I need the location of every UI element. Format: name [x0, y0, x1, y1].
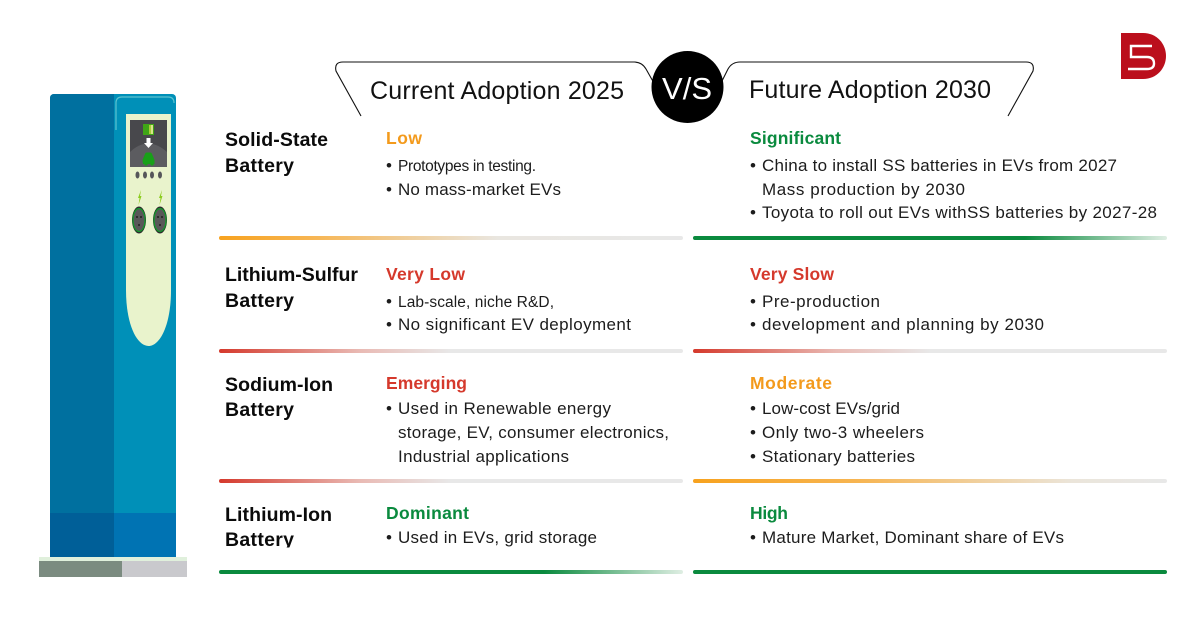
battery name — [225, 129, 328, 177]
header tab: Future Adoption 2030: Future Adoption 2030 — [749, 76, 991, 104]
V/S badge — [652, 51, 724, 123]
current status: • — [386, 156, 392, 175]
battery name: Battery — [225, 290, 294, 312]
battery name: Lithium-Sulfur — [225, 264, 358, 286]
charger screen — [130, 120, 167, 167]
current status: • — [386, 292, 392, 311]
logo — [1121, 33, 1166, 79]
current status: Lab-scale, niche R&D, — [398, 294, 554, 311]
charger body — [50, 94, 176, 557]
charger base — [39, 557, 187, 577]
divider bars — [219, 570, 1167, 574]
row: Sodium-Ion Battery — [219, 373, 1167, 483]
row: Lithium-Ion Battery — [219, 503, 1167, 574]
current status: Used in Renewable energy — [398, 399, 612, 418]
divider bars — [219, 479, 1167, 483]
current status: • — [386, 180, 392, 199]
future outlook — [750, 503, 1064, 547]
future outlook: • — [750, 528, 756, 547]
V/S badge: V/S — [662, 71, 712, 106]
future outlook: Mature Market, Dominant share of EVs — [762, 528, 1064, 547]
front panel — [126, 114, 171, 346]
current status: • — [386, 315, 392, 334]
current status — [386, 503, 597, 547]
battery name: Solid-State — [225, 129, 328, 151]
future outlook: • — [750, 203, 756, 222]
battery name: Lithium-Ion — [225, 504, 332, 526]
future outlook: • — [750, 399, 756, 418]
indicator lights — [136, 172, 162, 178]
future outlook: Stationary batteries — [762, 447, 915, 466]
battery name: Battery — [225, 529, 294, 551]
future outlook: • — [750, 447, 756, 466]
header tab: Current Adoption 2025: Current Adoption 2025 — [370, 77, 624, 105]
future outlook: • — [750, 292, 756, 311]
future outlook: • — [750, 156, 756, 175]
future outlook: Low-cost EVs/grid — [762, 399, 900, 418]
future outlook — [750, 264, 1044, 334]
current status — [386, 128, 561, 199]
current status: Low — [386, 128, 422, 148]
future outlook: Toyota to roll out EVs withSS batteries by 2027-28 — [762, 203, 1157, 222]
current status: Dominant — [386, 503, 469, 523]
current status — [386, 373, 669, 466]
future outlook: • — [750, 315, 756, 334]
charging sockets — [132, 190, 167, 234]
current status: • — [386, 399, 392, 418]
current status: No mass-market EVs — [398, 180, 561, 199]
current status: • — [386, 528, 392, 547]
battery name — [225, 374, 333, 421]
header tab: Future Adoption 2030 — [720, 62, 1033, 116]
current status — [386, 264, 631, 334]
current status: Very Low — [386, 264, 465, 284]
current status: Prototypes in testing. — [398, 158, 536, 175]
future outlook: Moderate — [750, 373, 832, 393]
divider bars — [219, 349, 1167, 353]
row: Lithium-Sulfur Battery — [219, 264, 1167, 353]
current status: Industrial applications — [398, 447, 569, 466]
future outlook: Very Slow — [750, 264, 834, 284]
battery name — [226, 507, 331, 548]
future outlook: • — [750, 423, 756, 442]
battery name: Battery — [225, 399, 294, 421]
current status: storage, EV, consumer electronics, — [398, 423, 669, 442]
future outlook — [750, 128, 1157, 222]
header tab: Current Adoption 2025 — [336, 62, 655, 116]
future outlook: Pre-production — [762, 292, 880, 311]
row: Solid-State Battery — [219, 128, 1167, 240]
battery name: Sodium-Ion — [225, 374, 333, 396]
future outlook: development and planning by 2030 — [762, 315, 1044, 334]
battery name: Battery — [225, 155, 294, 177]
divider bars — [219, 236, 1167, 240]
battery name — [225, 264, 358, 312]
future outlook: China to install SS batteries in EVs from 2027 — [762, 156, 1117, 175]
future outlook: Mass production by 2030 — [762, 180, 965, 199]
current status: Used in EVs, grid storage — [398, 528, 597, 547]
future outlook: High — [750, 503, 788, 523]
illustration: EV charging station — [39, 94, 187, 577]
future outlook: Only two-3 wheelers — [762, 423, 924, 442]
current status: Emerging — [386, 373, 467, 393]
future outlook — [750, 373, 924, 466]
current status: No significant EV deployment — [398, 315, 631, 334]
future outlook: Significant — [750, 128, 841, 148]
